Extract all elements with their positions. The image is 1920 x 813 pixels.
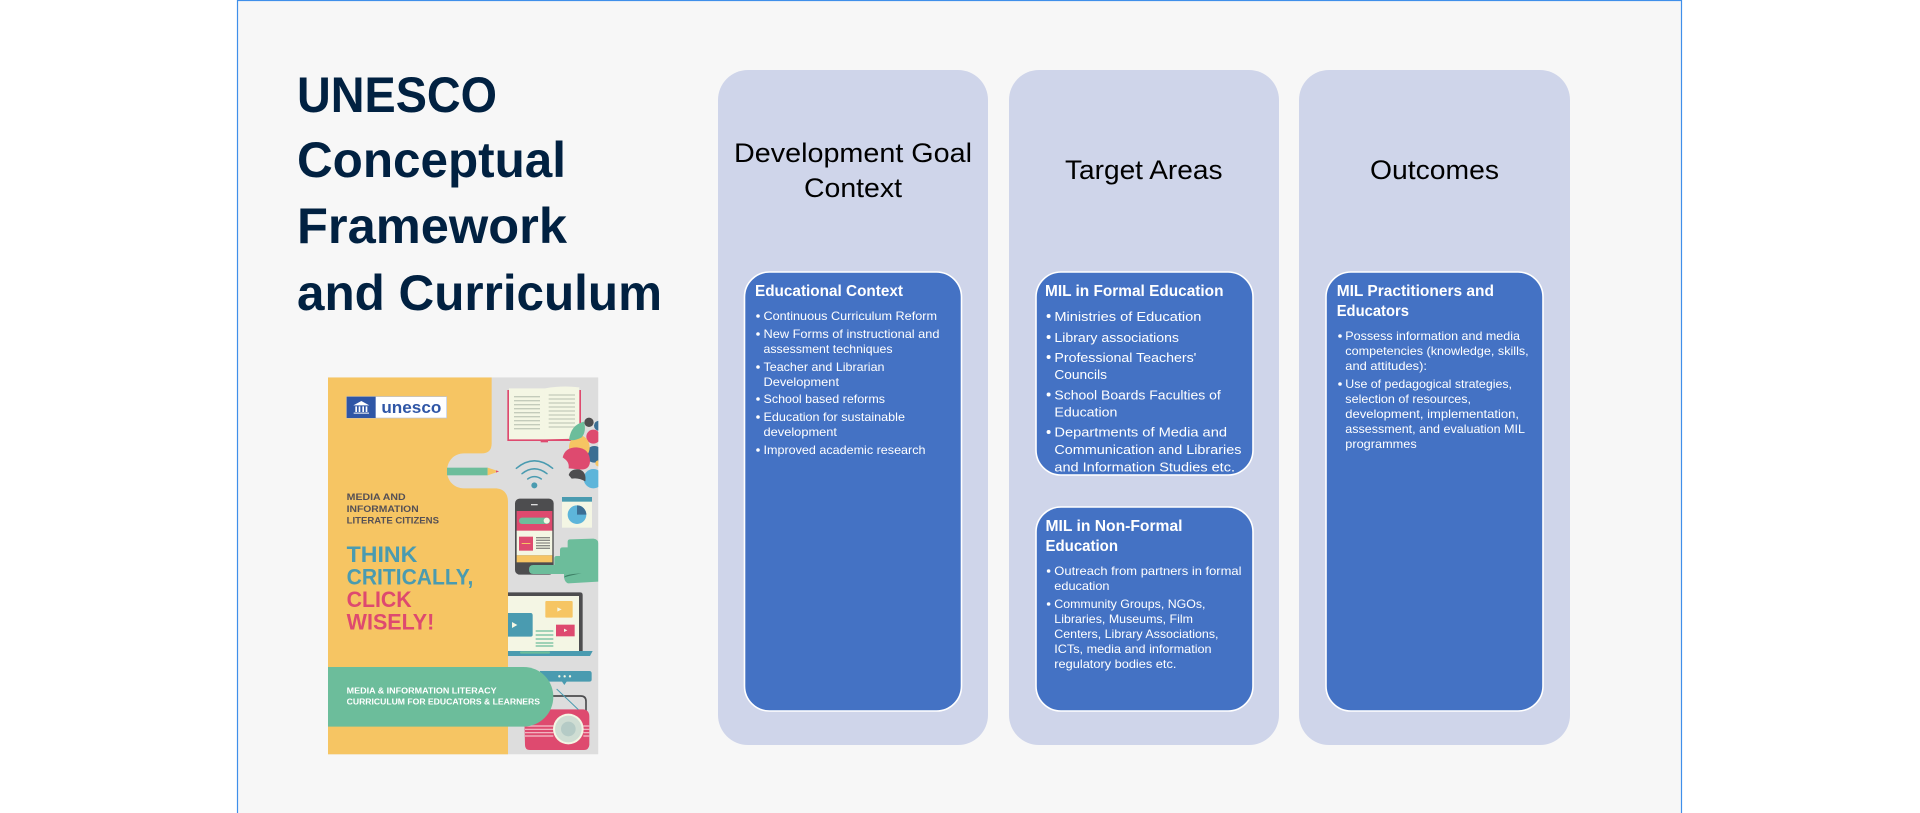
icon: wifi signal bbox=[516, 461, 553, 488]
card: educational context: School based reforms bbox=[764, 393, 885, 406]
card: MIL practitioners and educators: development, implementation, bbox=[1345, 408, 1519, 421]
card: educational context bbox=[744, 272, 962, 711]
card: MIL in formal education: Councils bbox=[1054, 367, 1107, 382]
card: MIL in non-formal education bbox=[1036, 507, 1253, 711]
title: UNESCO bbox=[297, 67, 497, 123]
card: MIL in formal education: and Information Studies etc. bbox=[1054, 460, 1235, 475]
cover headline bbox=[346, 546, 472, 630]
card: MIL in non-formal education: MIL in Non-Formal bbox=[1046, 518, 1182, 535]
card: MIL in formal education: Communication and Libraries bbox=[1054, 442, 1242, 457]
cover subtitle: INFORMATION bbox=[347, 504, 419, 514]
title: and Curriculum bbox=[297, 265, 662, 321]
cover subtitle bbox=[347, 494, 439, 524]
cover footer banner: CURRICULUM FOR EDUCATORS & LEARNERS bbox=[347, 697, 541, 706]
panel: development goal context bbox=[718, 70, 988, 745]
card: MIL in non-formal education: ICTs, media and information bbox=[1054, 643, 1212, 656]
card: MIL in non-formal education: regulatory bodies etc. bbox=[1054, 658, 1176, 671]
card: educational context: development bbox=[764, 426, 838, 439]
cover headline: WISELY! bbox=[347, 609, 434, 634]
icon: pencil bbox=[447, 468, 499, 475]
cover headline: CRITICALLY, bbox=[347, 564, 473, 589]
card: educational context: Improved academic research bbox=[764, 444, 926, 457]
panel: outcomes bbox=[1299, 70, 1570, 745]
title bbox=[297, 67, 662, 321]
card: MIL in non-formal education: Outreach from partners in formal bbox=[1054, 565, 1242, 578]
unesco logo bbox=[347, 397, 447, 418]
icon: smartphone bbox=[515, 499, 554, 575]
card: MIL in non-formal education: education bbox=[1054, 580, 1110, 593]
card: educational context: Educational Context bbox=[755, 283, 903, 300]
icon: pie chart window bbox=[562, 497, 592, 528]
icon: pointing hand bbox=[529, 539, 598, 583]
card: MIL in formal education: School Boards Faculties of bbox=[1054, 387, 1221, 402]
card: educational context: assessment techniques bbox=[764, 343, 893, 356]
card: MIL in non-formal education: Education bbox=[1046, 538, 1118, 555]
card: MIL practitioners and educators: assessment, and evaluation MIL bbox=[1345, 423, 1526, 436]
card: educational context: Teacher and Librarian bbox=[764, 361, 884, 374]
cover headline: THINK bbox=[347, 542, 417, 567]
card: MIL practitioners and educators: Possess information and media bbox=[1345, 330, 1521, 343]
cover footer banner bbox=[328, 667, 553, 727]
cover footer banner: MEDIA & INFORMATION LITERACY bbox=[347, 687, 497, 696]
panel heading: Outcomes bbox=[1370, 155, 1499, 185]
card: MIL practitioners and educators: MIL Practitioners and bbox=[1337, 283, 1494, 300]
icon: radio bbox=[524, 689, 589, 750]
cover subtitle: LITERATE CITIZENS bbox=[347, 516, 439, 526]
card: MIL in formal education: Education bbox=[1054, 405, 1117, 420]
book cover: Think Critically, Click Wisely bbox=[328, 377, 604, 754]
card: educational context: Development bbox=[764, 376, 840, 389]
card: MIL practitioners and educators: Educators bbox=[1337, 303, 1409, 320]
title: Conceptual bbox=[297, 132, 566, 188]
card: MIL in formal education bbox=[1036, 272, 1253, 475]
icon: open book bbox=[507, 387, 581, 442]
card: educational context: New Forms of instructional and bbox=[764, 328, 940, 341]
infographic canvas bbox=[236, 0, 1682, 813]
card: MIL in non-formal education: Community Groups, NGOs, bbox=[1054, 598, 1206, 611]
title: Framework bbox=[297, 198, 567, 254]
card: educational context: Education for sustainable bbox=[764, 411, 905, 424]
icon: laptop bbox=[508, 592, 593, 656]
panel heading: Context bbox=[804, 173, 903, 203]
card: MIL practitioners and educators: competencies (knowledge, skills, bbox=[1345, 345, 1529, 358]
card: MIL practitioners and educators bbox=[1326, 272, 1543, 711]
unesco logo: unesco bbox=[381, 398, 441, 417]
panel: target areas bbox=[1009, 70, 1279, 745]
slide background frame bbox=[238, 0, 1682, 813]
panel heading: Development Goal bbox=[734, 138, 972, 168]
card: educational context: Continuous Curriculum Reform bbox=[764, 310, 937, 323]
cover headline: CLICK bbox=[347, 587, 412, 612]
card: MIL in formal education: Library associations bbox=[1054, 330, 1179, 345]
card: MIL in formal education: Ministries of Education bbox=[1054, 309, 1201, 324]
panel heading: Target Areas bbox=[1065, 155, 1222, 185]
icon: speech bubble bbox=[540, 671, 592, 685]
card: MIL in formal education: Professional Teachers' bbox=[1054, 350, 1196, 365]
card: MIL in formal education: Departments of Media and bbox=[1054, 425, 1227, 440]
panel heading bbox=[734, 138, 972, 203]
card: MIL practitioners and educators: selection of resources, bbox=[1345, 393, 1471, 406]
card: MIL practitioners and educators: Use of pedagogical strategies, bbox=[1345, 378, 1512, 391]
cover subtitle: MEDIA AND bbox=[347, 492, 406, 502]
card: MIL in formal education: MIL in Formal Education bbox=[1045, 283, 1224, 300]
card: MIL in non-formal education: Centers, Library Associations, bbox=[1054, 628, 1218, 641]
icon: people heads bbox=[562, 418, 598, 488]
card: MIL in non-formal education: Libraries, Museums, Film bbox=[1054, 613, 1193, 626]
card: MIL practitioners and educators: programmes bbox=[1345, 438, 1417, 451]
card: MIL practitioners and educators: and attitudes): bbox=[1345, 360, 1427, 373]
